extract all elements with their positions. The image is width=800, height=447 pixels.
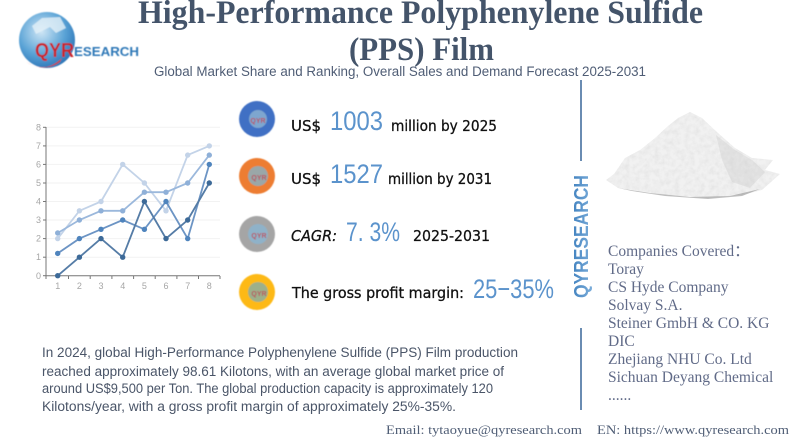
line chart: 3 <box>98 281 104 291</box>
companies covered list: Companies Covered： <box>608 243 750 260</box>
footer contact: EN: https://www.qyresearch.com <box>597 422 789 437</box>
subtitle: Global Market Share and Ranking, Overall Sales and Demand Forecast 2025-2031 <box>154 64 646 79</box>
summary paragraph: around US$9,500 per Ton. The global production capacity is approximately 120 <box>42 381 493 396</box>
line chart: 5 <box>36 178 41 188</box>
stat: CAGR: 2025-2031 <box>413 227 490 245</box>
stat: gross profit margin <box>291 274 554 304</box>
summary paragraph: reached approximately 98.61 Kilotons, with an average global market price of <box>42 364 504 379</box>
stat: market size 2025 <box>291 106 497 136</box>
line chart: 1 <box>36 252 41 262</box>
stat: market size 2031: million by 2031 <box>388 170 492 188</box>
icon: yellow badge <box>239 274 275 310</box>
stat: market size 2025: 1003 <box>330 106 383 136</box>
icon: blue badge: QYR <box>250 118 266 125</box>
line chart: 2 <box>77 281 82 291</box>
companies covered list: Steiner GmbH & CO. KG <box>608 315 769 332</box>
stat: market size 2031: US$ <box>291 170 321 188</box>
companies covered list: Zhejiang NHU Co. Ltd <box>608 351 752 368</box>
stat: CAGR: 7. 3% <box>346 217 400 247</box>
icon: grey badge <box>239 216 275 252</box>
footer contact <box>386 422 789 437</box>
stat: market size 2031: 1527 <box>330 159 383 189</box>
stat: gross profit margin: 25−35% <box>473 274 554 304</box>
icon: grey badge: QYR <box>251 233 267 240</box>
series: dark blue <box>55 180 212 278</box>
stat: CAGR: CAGR: <box>291 227 337 245</box>
stat: market size 2025: million by 2025 <box>391 117 497 135</box>
series: light blue <box>55 152 212 236</box>
line chart: 6 <box>36 160 41 170</box>
series: lightest <box>55 143 212 241</box>
summary paragraph: Kilotons/year, with a gross profit margin of approximately 25%-35%. <box>42 399 456 414</box>
line chart: 5 <box>142 281 147 291</box>
stat: market size 2031 <box>291 159 492 189</box>
summary paragraph <box>42 345 518 414</box>
line chart: 8 <box>207 281 212 291</box>
line chart: 6 <box>163 281 169 291</box>
line chart: 3 <box>36 215 41 225</box>
title: (PPS) Film <box>349 32 494 68</box>
stat: gross profit margin: The gross profit margin: <box>291 284 464 302</box>
title <box>138 0 703 68</box>
logo: QYResearch globe: QYR <box>35 40 74 62</box>
icon: orange badge <box>239 158 275 194</box>
companies covered list: DIC <box>608 333 635 350</box>
product image: white powder pile <box>606 112 780 199</box>
companies covered list: Sichuan Deyang Chemical <box>608 369 773 386</box>
line chart: 0 <box>36 271 41 281</box>
line chart: 7 <box>36 141 41 151</box>
line chart: 4 <box>36 196 41 206</box>
vertical brand divider: QYRESEARCH <box>571 175 593 298</box>
companies covered list: Solvay S.A. <box>608 297 682 314</box>
companies covered list: CS Hyde Company <box>608 279 729 296</box>
line chart: 7 <box>185 281 190 291</box>
icon: blue badge <box>239 101 275 137</box>
line chart: 1 <box>55 281 60 291</box>
footer contact: Email: tytaoyue@qyresearch.com <box>386 422 582 437</box>
logo: QYResearch globe: ESEARCH <box>74 44 139 59</box>
line chart: 8 <box>36 122 41 132</box>
series: medium blue <box>55 162 212 256</box>
icon: orange badge: QYR <box>251 175 267 182</box>
companies covered list: ...... <box>608 387 631 404</box>
companies covered list: Toray <box>608 261 644 278</box>
stat: CAGR <box>291 217 490 247</box>
icon: yellow badge: QYR <box>251 291 267 298</box>
summary paragraph: In 2024, global High-Performance Polyphenylene Sulfide (PPS) Film production <box>42 345 518 360</box>
line chart: 2 <box>36 234 41 244</box>
line chart: 4 <box>120 281 125 291</box>
companies covered list <box>608 243 773 404</box>
stat: market size 2025: US$ <box>291 117 321 135</box>
line chart <box>36 122 220 291</box>
logo: QYResearch globe <box>19 12 139 68</box>
